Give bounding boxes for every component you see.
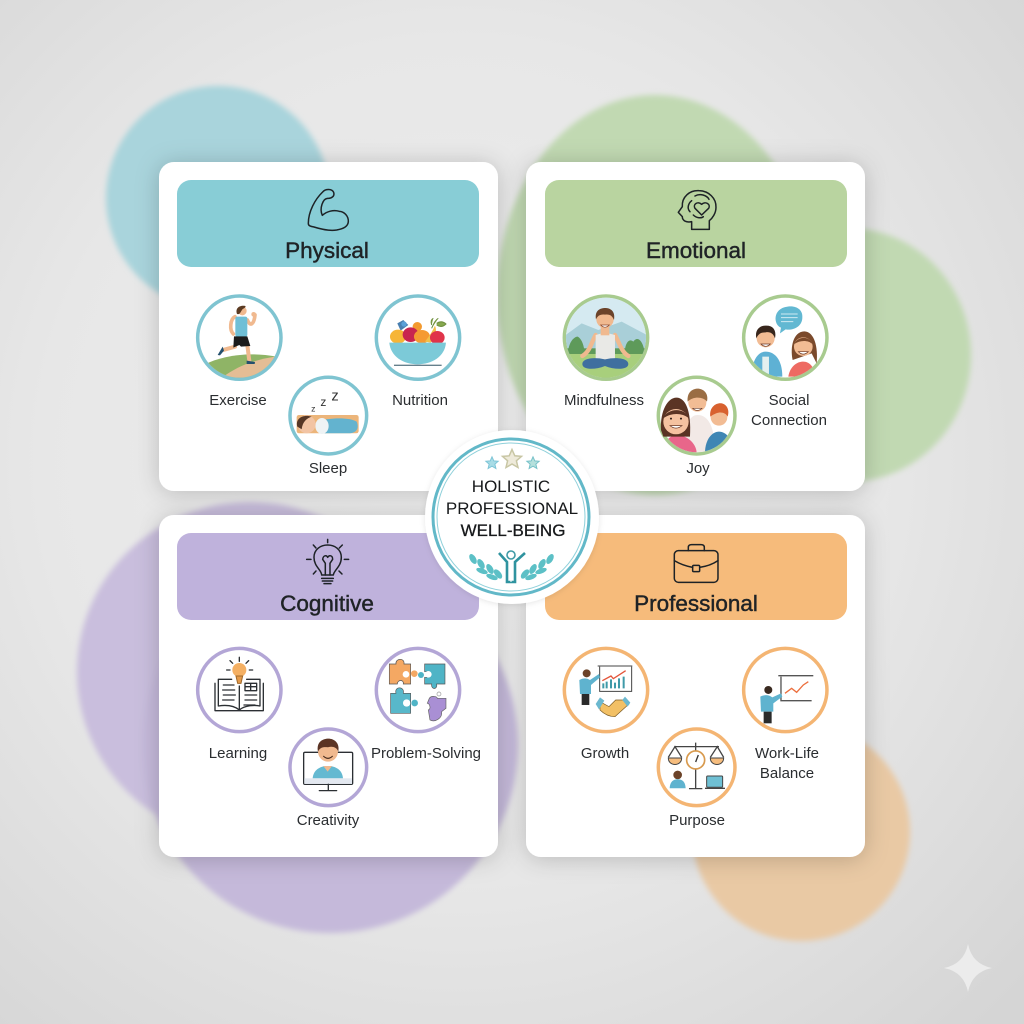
label: Sleep [309,460,347,477]
heading: physical: Physical [285,238,369,263]
icon: happy group [658,377,735,454]
joy item [658,377,735,477]
icon: sleeping person: z [331,389,339,405]
icon: briefcase [674,545,718,582]
panel: physical [159,162,498,491]
icon: flexed arm [308,190,348,230]
icon: puzzle pieces [376,648,460,732]
label: Growth [581,745,629,762]
heading: professional: Professional [634,591,758,616]
panel: cognitive [159,515,498,857]
label line 2: Connection [751,412,827,429]
center badge [425,430,599,604]
badge title: WELL-BEING [461,521,565,540]
icon: balance scale [658,729,735,806]
label: Nutrition [392,392,448,409]
growth item [564,648,648,762]
label: Work-Life [755,745,819,762]
icon: sleeping person [290,377,367,454]
header: physical [177,180,479,267]
badge outer ring [433,439,589,595]
icon: two people talking [744,296,827,379]
card: physical [159,162,498,491]
nutrition item [376,296,460,409]
card: cognitive [159,515,498,857]
label: Exercise [209,392,267,409]
label: Mindfulness [564,392,644,409]
badge disc [425,430,599,604]
exercise item [198,296,281,409]
creativity item [290,729,367,829]
card: emotional [526,162,865,491]
card: professional [526,515,865,857]
icon: sleeping person: z [311,404,315,414]
panel: emotional [526,162,865,491]
purpose item [658,729,735,829]
problem-solving item [371,648,481,762]
icon: head with heart [678,191,716,229]
label: Problem-Solving [371,745,481,762]
panel: professional [526,515,865,857]
background blobs [77,86,971,941]
learning item [198,648,281,762]
heading: emotional: Emotional [646,238,746,263]
icon: sleeping person: z [320,395,326,409]
label: Joy [686,460,710,477]
badge title [446,477,578,540]
icon: runner [198,296,281,387]
header: emotional [545,180,847,267]
header: professional [545,533,847,620]
label: Learning [209,745,267,762]
sleep item [290,377,367,477]
watermark sparkle [944,944,992,992]
icon: presenter with chart [744,648,827,732]
mindfulness item [563,296,650,409]
icon: meditating person [563,296,650,381]
social connection item [744,296,827,429]
header: cognitive [177,533,479,620]
icon: figure with laurels [468,551,555,582]
icon: presenter and handshake [564,648,648,732]
icon: open book with bulb [198,648,281,732]
badge inner ring [437,443,585,591]
heading: cognitive: Cognitive [280,591,374,616]
work-life balance item [744,648,827,782]
badge title: HOLISTIC [472,477,550,496]
label: Creativity [297,812,360,829]
label: Social [769,392,809,409]
icon: person on monitor [290,729,367,806]
icon: fruit bowl [376,296,460,379]
stars [486,450,539,469]
icon: light bulb [307,539,349,584]
label: Purpose [669,812,725,829]
label line 2: Balance [760,765,814,782]
badge title: PROFESSIONAL [446,499,578,518]
